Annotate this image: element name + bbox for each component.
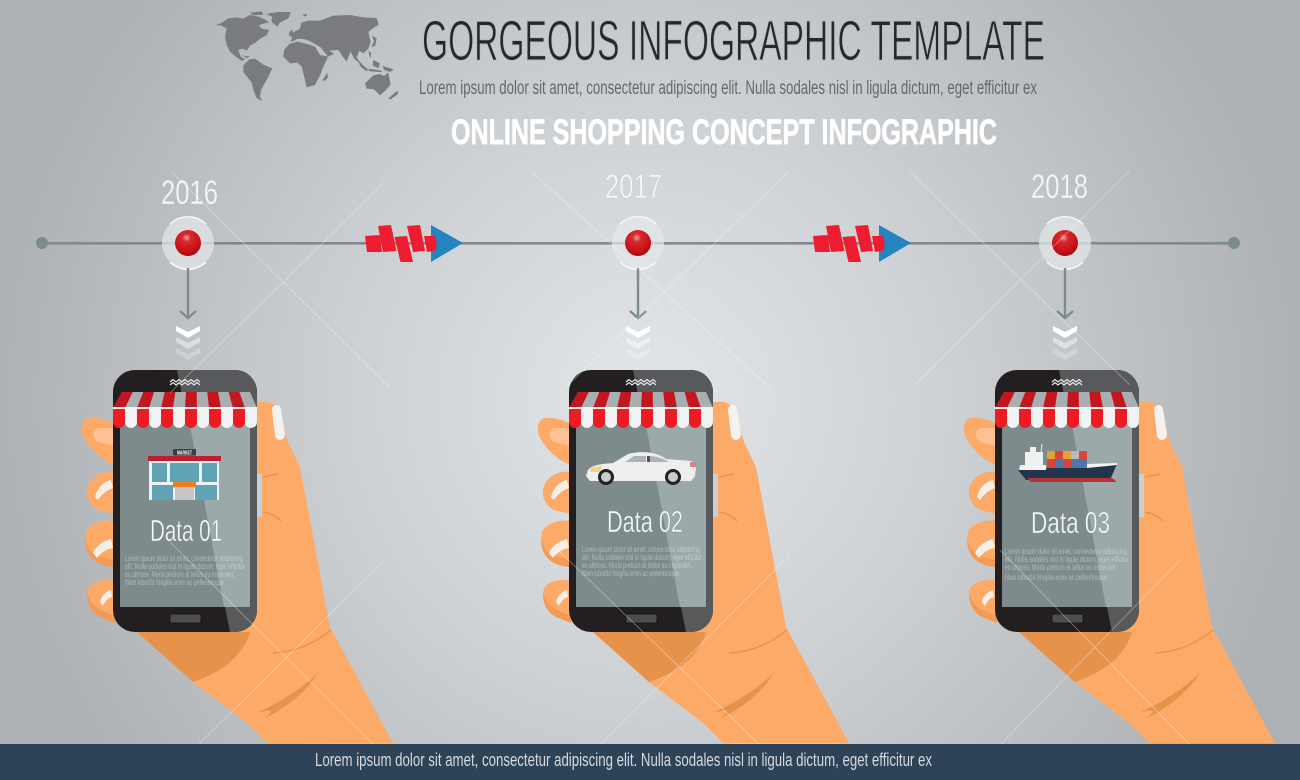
panel: Data 01: [82, 370, 393, 743]
marker: 2018: [1039, 217, 1091, 318]
subtitle: Lorem ipsum dolor sit amet, consectetur adipiscing elit. Nulla sodales nisl in ligula dictum, eget efficitur ex: [419, 78, 1037, 99]
chevrons: 2017: [626, 326, 650, 360]
text block 3: ex ultrices. Morbi pretium at tellus eu imperdiet.: [1005, 563, 1117, 572]
timeline start dot: [36, 237, 48, 249]
panel: Data 02: [538, 370, 849, 743]
icon: market building: [148, 449, 221, 500]
hand 2: [538, 402, 849, 743]
label: Data 03: Data 03: [1031, 505, 1110, 540]
text block 2: [582, 545, 702, 578]
text block 3: Nam lobortis fringilla enim ac pellentesque.: [1005, 573, 1108, 582]
arrow: 2016 to 2017: [365, 225, 463, 262]
year: 2016: 2016: [161, 174, 218, 212]
text block 1: [125, 554, 245, 587]
hand 1: [82, 402, 393, 743]
marker: 2017: [612, 217, 664, 318]
timeline: [36, 237, 1240, 249]
text block 1: Lorem ipsum dolor sit amet, consectetur adipiscing: [125, 554, 243, 563]
phone 3: [995, 370, 1139, 632]
text block 3: Lorem ipsum dolor sit amet, consectetur adipiscing: [1005, 547, 1127, 556]
text block 2: Lorem ipsum dolor sit amet, consectetur adipiscing: [582, 545, 700, 554]
text block 2: elit. Nulla sodales nisl in ligula dictum, eget efficitur: [582, 553, 702, 562]
heading: ONLINE SHOPPING CONCEPT INFOGRAPHIC: [451, 113, 997, 152]
text block 1: Nam lobortis fringilla enim ac pellentesque.: [125, 578, 225, 587]
text block 2: Nam lobortis fringilla enim ac pellentesque.: [582, 569, 680, 578]
text block 1: elit. Nulla sodales nisl in ligula dictum, eget efficitur: [125, 562, 245, 571]
hand 3: [964, 402, 1275, 743]
text block 3: elit. Nulla sodales nisl in ligula dictum, eget efficitur: [1005, 555, 1129, 564]
phone 1: [113, 370, 257, 632]
marker: 2016: [162, 217, 214, 318]
footer bar: [0, 744, 1300, 780]
year: 2018: 2018: [1031, 168, 1088, 206]
footer text: Lorem ipsum dolor sit amet, consectetur adipiscing elit. Nulla sodales nisl in ligula dictum, eget efficitur ex: [315, 750, 932, 770]
icon: car: [586, 452, 696, 485]
phone 2: [569, 370, 713, 632]
icon: world map: [215, 11, 398, 101]
text block 1: ex ultrices. Morbi pretium at tellus eu imperdiet.: [125, 570, 235, 579]
label: Data 02: Data 02: [607, 504, 683, 539]
icon: container ship: [1018, 444, 1117, 482]
label: Data 01: Data 01: [150, 513, 222, 548]
panel: Data 03: [964, 370, 1275, 743]
arrow: 2017 to 2018: [813, 225, 911, 262]
chevrons: 2016: [176, 326, 200, 360]
year: 2017: 2017: [605, 168, 662, 206]
icon: market building: MARKET: [177, 450, 192, 456]
text block 3: [1005, 547, 1129, 582]
chevrons: 2018: [1053, 326, 1077, 360]
timeline end dot: [1228, 237, 1240, 249]
text block 2: ex ultrices. Morbi pretium at tellus eu imperdiet.: [582, 561, 692, 570]
